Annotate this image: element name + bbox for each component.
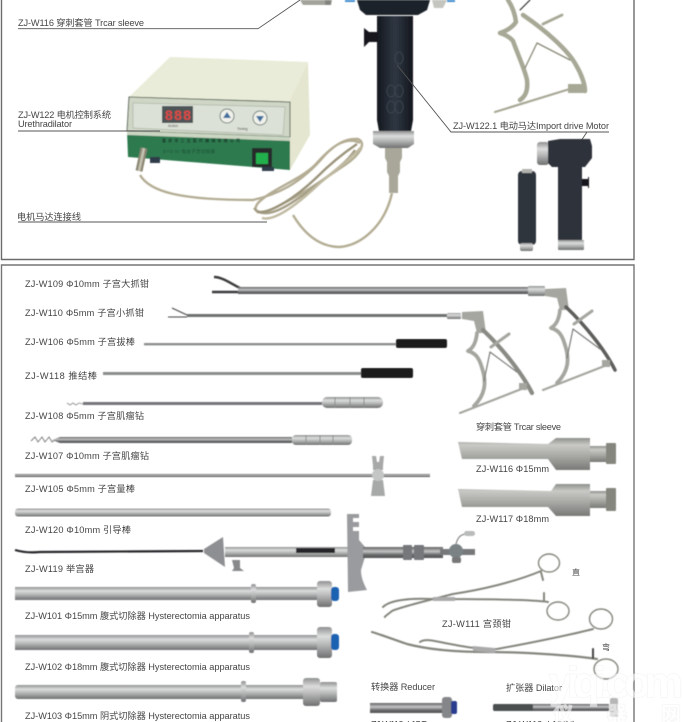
top-right forceps handle [495,0,585,112]
label: curved: 弯 [602,642,610,652]
label: ZJ-W122.1 drive motor: ZJ-W122.1 电动马达Import drive Motor [453,120,609,131]
label: ZJ-W122 control system [18,109,160,131]
instrument labels, left column: ZJ-W101 Φ15mm 腹式切除器 Hysterectomia apparatus [25,610,250,621]
instrument labels, left column: ZJ-W109 Φ10mm 子宫大抓钳 [25,278,149,289]
drive motor unit [537,139,592,250]
instrument: W109 forceps [212,277,615,390]
instrument labels, left column: ZJ-W103 Φ15mm 阴式切除器 Hysterectomia apparatus [25,710,250,721]
instrument: W105 probe [15,456,430,496]
instrument labels, left column: ZJ-W102 Φ18mm 腹式切除器 Hysterectomia apparatus [25,661,250,672]
dilator heading: 扩张器 Dilator [506,682,562,693]
instrument: W101 apparatus [15,581,339,607]
label: straight: 直 [572,567,580,577]
instrument: W117 sleeve [458,484,616,516]
instrument: reducer [370,697,457,718]
instrument: W118 rod [103,368,413,378]
handle [460,311,532,413]
instrument labels, left column: ZJ-W119 举宫器 [25,563,94,574]
reducer heading: 转换器 Reducer [371,681,435,692]
label: ZJ-W122 control system: Urethradilator [18,119,72,129]
label: W116 size: ZJ-W116 Φ15mm [476,464,549,474]
label: ZJ-W122.1 drive motor [397,65,609,150]
label: ZJ-W122 control system: ZJ-W122 电机控制系统 [18,109,111,120]
instrument: W110 forceps [168,308,532,413]
instrument: W116 sleeve [458,438,616,470]
panel captions: Action [168,124,178,128]
label: W111 cervical forceps: ZJ-W111 宫颈钳 [442,618,511,629]
instrument: W119 uterine manipulator [15,514,475,592]
power switch [252,148,272,167]
panel captions [162,124,248,155]
motor cable and connector [139,139,392,247]
instrument: W102 apparatus [15,627,339,658]
instrument labels, left column: ZJ-W120 Φ10mm 引导棒 [25,524,131,535]
label: W117 size: ZJ-W117 Φ18mm [476,514,549,524]
label: motor cable: 电机马达连接线 [17,211,81,222]
panel captions: 重庆市三五医疗器械有限公司 [162,137,240,143]
instrument labels, left column [25,278,250,721]
instrument labels, left column: ZJ-W106 Φ5mm 子宫拔棒 [25,336,135,347]
trocar sleeve fragment [300,0,332,5]
instrument: dilator [493,698,618,717]
instrument labels, left column: ZJ-W108 Φ5mm 子宫肌瘤钻 [25,410,144,421]
instrument: W111 curved clamp [372,609,618,679]
control box urethradilator [127,57,310,171]
motor handle [345,0,455,193]
watermark: yiqi.com [549,659,683,707]
sleeve heading: 穿刺套管 Trcar sleeve [476,421,561,432]
spare grip cylinder [518,169,536,251]
down button [253,111,267,125]
panel captions: DYZ-III 电动子宫切除器 [163,148,216,155]
instrument labels, left column: ZJ-W110 Φ5mm 子宫小抓钳 [25,307,144,318]
panel: instruments [2,265,634,722]
instrument labels, left column: ZJ-W105 Φ5mm 子宫量棒 [25,483,135,494]
instrument: W108 drill [67,397,383,408]
instrument: W106 rod [144,339,447,348]
LED display: 888 [165,107,191,123]
instrument: W103 apparatus [15,678,337,706]
panel: motor system [2,0,634,260]
up button [220,109,234,123]
label: ZJ-W116 trocar sleeve: ZJ-W116 穿刺套管 Trcar sleeve [18,17,144,28]
handle [543,288,615,390]
instrument labels, left column: ZJ-W118 推结棒 [25,370,97,381]
label: ZJ-W116 trocar sleeve [18,0,300,29]
instrument: W111 straight clamp [383,554,569,620]
instrument labels, left column: ZJ-W107 Φ10mm 子宫肌瘤钻 [25,450,149,461]
instrument: W107 drill [31,435,352,445]
instrument: W120 guide rod [15,508,331,516]
panel captions: Timing [237,127,248,131]
